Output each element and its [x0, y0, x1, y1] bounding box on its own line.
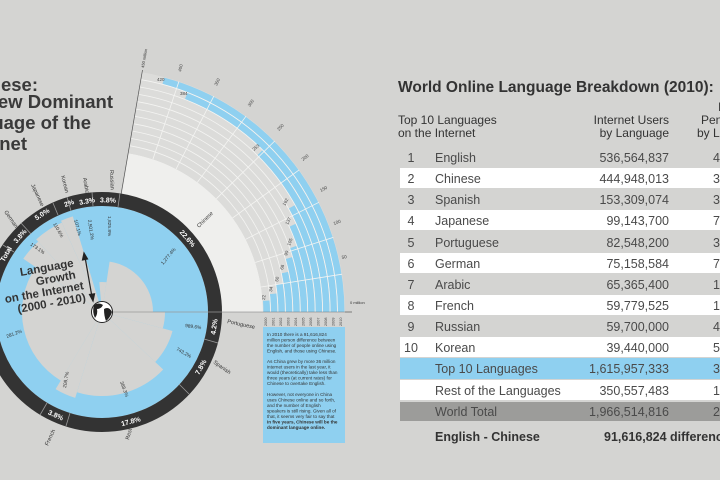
table rows: Portuguese: [435, 236, 499, 250]
chart: circular language growth: 1,825.8%: [106, 216, 112, 237]
chart: circular language growth: 5.0%: [34, 207, 52, 222]
chart: circular language growth: Portuguese: [227, 319, 255, 331]
chart label: language growth: (2000 - 2010): [17, 292, 87, 316]
table rows: 7: [408, 278, 415, 292]
chart: circular language growth: Total: [0, 246, 14, 263]
callout: text box: that, it seems very fair to say that: [267, 414, 335, 419]
table rows: World Total: [435, 405, 497, 419]
chart: quarter arc growth chart: 22: [261, 294, 266, 300]
table rows: Rest of the Languages: [435, 384, 561, 398]
table rows: Spanish: [435, 193, 480, 207]
table rows: 536,564,837: [599, 151, 669, 165]
callout: text box: dominant language online.: [267, 425, 325, 430]
chart: circular language growth: 281.2%: [6, 328, 24, 340]
table header: on the Internet: [398, 126, 476, 140]
table rows: 350,557,483: [599, 384, 669, 398]
callout: text box: However, not everyone in China: [267, 392, 333, 397]
chart: circular language growth: 173.1%: [29, 242, 46, 256]
chart: circular language growth: Korean: [59, 175, 69, 194]
table rows: 59,779,525: [606, 299, 669, 313]
chart: quarter arc growth chart: 68: [279, 264, 285, 270]
chart: quarter arc growth chart: 2008: [324, 318, 328, 326]
chart: quarter arc growth chart: 2010: [339, 318, 343, 326]
table header: Top 10 Languages: [398, 113, 497, 127]
chart: circular language growth: 110.6%: [51, 222, 65, 239]
chart: circular language growth: 7.8%: [195, 358, 209, 376]
table rows: 1: [408, 151, 415, 165]
table rows: 39,440,000: [606, 341, 669, 355]
table rows: 59,700,000: [606, 320, 669, 334]
table rows: 10: [404, 341, 418, 355]
arrow: growth: [82, 253, 94, 301]
chart: circular language growth: 3.3%: [79, 197, 96, 207]
table rows: Top 10 Languages: [435, 362, 538, 376]
table rows: German: [435, 257, 480, 271]
table header: by Language: [600, 126, 669, 140]
table rows: 444,948,013: [599, 172, 669, 186]
table rows: 153,309,074: [599, 193, 669, 207]
chart: quarter arc growth chart: 90: [283, 250, 290, 256]
table rows: English: [435, 151, 476, 165]
callout: text box: English, and those using Chinese.: [267, 348, 336, 354]
chart label: language growth: Growth: [35, 269, 77, 288]
callout: text box: uses Chinese online and so forth,: [267, 398, 335, 402]
chart: quarter arc growth chart: 2006: [309, 318, 313, 326]
chart: quarter arc growth chart: 0 million: [350, 300, 365, 305]
table rows: 75,158,584: [606, 257, 669, 271]
chart: quarter arc growth chart: 105: [286, 237, 294, 246]
chart: quarter arc growth chart: 2003: [286, 318, 290, 326]
table rows: 99,143,700: [606, 214, 669, 228]
table rows: Arabic: [435, 278, 470, 292]
chart: circular language growth: 2,501.2%: [86, 219, 95, 241]
table rows: French: [435, 299, 474, 313]
callout: text box: in five years, Chinese will be the: [267, 420, 338, 424]
table rows: Korean: [435, 341, 475, 355]
chart: circular language growth: 17.8%: [121, 416, 142, 428]
chart: quarter arc growth chart: 137: [284, 216, 292, 225]
table footer: English - Chinese difference: English - Chinese: [435, 430, 540, 444]
chart: circular language growth: 107.1%: [72, 219, 82, 237]
chart: quarter arc growth chart: 200: [301, 153, 310, 162]
chart: quarter arc growth chart: 350: [213, 77, 221, 86]
callout: text box: speakers is still rising. Given all of: [267, 408, 337, 414]
chart: quarter arc growth chart: 50: [341, 254, 348, 260]
chart label: language growth: [0, 257, 87, 318]
table header: Internet Users: [594, 113, 669, 127]
callout: text box: million person difference between: [267, 338, 336, 342]
table rows: 1,615,957,333: [589, 362, 669, 376]
table rows: Japanese: [435, 214, 489, 228]
chart: quarter arc growth chart: 2007: [316, 318, 320, 326]
chart: quarter arc growth chart: 250: [276, 122, 285, 132]
table rows: 82,548,200: [606, 236, 669, 250]
chart: circular language growth: 1,277.4%: [160, 246, 178, 266]
chart: quarter arc growth chart: 34: [268, 286, 274, 292]
callout: text box: three years (at current rates) for: [267, 376, 332, 380]
chart: circular language growth: 4.2%: [210, 318, 220, 335]
chart: circular language growth: Rest: [125, 428, 134, 441]
table title: World Online Language Breakdown (2010):: [398, 79, 714, 96]
table rows: 65,365,400: [606, 278, 669, 292]
chart: quarter arc growth chart: 300: [247, 98, 255, 108]
chart label: language growth: Language: [19, 258, 75, 279]
table rows: 5: [408, 236, 415, 250]
table rows: 6: [408, 257, 415, 271]
chart: circular language growth: 388.3%: [118, 381, 130, 399]
chart: quarter arc growth chart: 100: [333, 219, 342, 226]
callout: text box: and the number of English: [267, 403, 321, 408]
chart: circular language growth: 22.6%: [178, 229, 197, 249]
table rows: 3: [408, 193, 415, 207]
icon: globe: [92, 302, 112, 322]
table rows: 2: [408, 172, 415, 186]
chart: quarter arc growth chart: 2009: [332, 318, 336, 326]
table rows: Chinese: [435, 172, 481, 186]
chart: circular language growth: French: [44, 429, 57, 447]
chart: circular language growth: German: [2, 210, 19, 229]
chart: circular language growth: 3.8%: [13, 228, 29, 245]
chart: circular language growth: Japanese: [29, 183, 45, 207]
chart label: language growth: on the Internet: [4, 280, 85, 306]
chart: quarter arc growth chart: 2002: [279, 318, 283, 326]
table rows: 9: [408, 320, 415, 334]
table header: [398, 100, 720, 140]
chart: circular language growth: 208.7%: [62, 371, 71, 388]
chart: quarter arc growth chart: 253: [251, 143, 261, 152]
chart: quarter arc growth chart: 2001: [272, 318, 276, 326]
table rows: 4: [408, 214, 415, 228]
chart: circular language growth: 3.8%: [100, 197, 117, 205]
chart: quarter arc growth chart: 2000: [264, 318, 268, 326]
callout: text box: Chinese to overtake English.: [267, 381, 325, 386]
callout: text box: As China grew by more 36 million: [267, 359, 336, 364]
callout: text box: the number of people online using: [267, 343, 337, 348]
chart: circular language growth: 3.8%: [47, 410, 65, 423]
chart: quarter arc growth chart: 162: [281, 197, 290, 206]
callout: text box: internet users in the last year, it: [267, 364, 331, 370]
table rows: Russian: [435, 320, 480, 334]
chart: quarter arc growth chart: [102, 48, 365, 326]
chart: circular language growth: Chinese: [196, 211, 215, 229]
chart: circular language growth: 2%: [63, 199, 76, 209]
chart: quarter arc growth chart: 150: [319, 185, 328, 193]
chart: quarter arc growth chart: 420: [157, 77, 165, 82]
chart: quarter arc growth chart: 2004: [294, 318, 298, 326]
title: [0, 74, 113, 154]
chart: circular language growth: Spanish: [212, 360, 232, 376]
table rows: [400, 151, 720, 421]
chart: circular language growth: [0, 170, 255, 447]
chart: circular language growth: Arabic: [81, 177, 90, 194]
table rows: 1,966,514,816: [589, 405, 669, 419]
chart: quarter arc growth chart: 50: [274, 276, 280, 282]
callout: text box: In 2010 there is a 91,616,824: [267, 332, 327, 337]
chart: circular language growth: 989.6%: [185, 323, 202, 331]
chart: quarter arc growth chart: 400: [177, 63, 184, 72]
callout: text box: would (theoretically) take less than: [267, 370, 338, 375]
table footer: English - Chinese difference: [435, 430, 720, 444]
chart: circular language growth: Russian: [108, 170, 115, 190]
chart: quarter arc growth chart: 2005: [302, 318, 306, 326]
table rows: 8: [408, 299, 415, 313]
chart: quarter arc growth chart: 384: [180, 91, 188, 96]
callout: text box: [263, 327, 345, 443]
chart: quarter arc growth chart: 450 million: [140, 48, 148, 68]
chart: circular language growth: 743.2%: [175, 347, 193, 360]
